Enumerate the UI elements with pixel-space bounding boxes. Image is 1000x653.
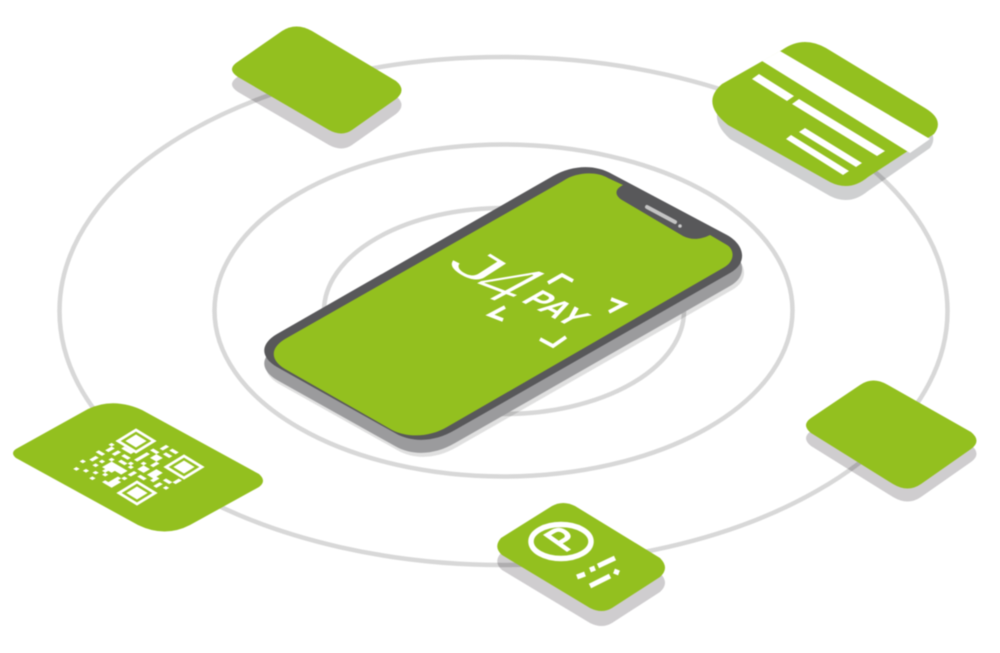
concentric signal rings xyxy=(60,57,948,565)
card: parking xyxy=(497,503,665,626)
scan brackets xyxy=(490,275,624,346)
phone screen with notch xyxy=(274,173,733,435)
card face xyxy=(497,503,665,611)
logo: J: J xyxy=(434,238,522,293)
card shadow xyxy=(717,56,933,200)
card face xyxy=(232,26,402,134)
card shadow xyxy=(497,518,665,626)
smartphone xyxy=(264,167,744,457)
speaker grille xyxy=(647,207,675,222)
logo: PAY: PAY xyxy=(514,285,599,331)
parking letter: P xyxy=(534,520,592,559)
card shadow xyxy=(232,42,402,148)
camera dot xyxy=(678,224,682,228)
logo: 4: 4 xyxy=(446,252,572,314)
card: QR code xyxy=(13,403,263,532)
icon: parking circle xyxy=(531,524,591,558)
QR finder right xyxy=(163,454,205,480)
card face xyxy=(712,42,938,186)
card shadow xyxy=(806,394,976,502)
card detail bars xyxy=(752,74,885,175)
QR data modules xyxy=(70,428,204,506)
card face xyxy=(806,380,976,488)
card: blank top left xyxy=(232,26,402,148)
card: credit card top right xyxy=(712,42,938,200)
parking dashes xyxy=(577,558,619,586)
phone shadow xyxy=(266,184,744,457)
phone side edge xyxy=(264,180,742,453)
QR code xyxy=(70,428,205,506)
QR finder bottom xyxy=(116,480,158,506)
card: blank right xyxy=(806,380,976,502)
QR finder top xyxy=(115,428,157,454)
magnetic stripe xyxy=(762,51,930,153)
phone bezel xyxy=(264,167,742,440)
card face xyxy=(13,403,263,532)
J4 PAY logo xyxy=(434,238,624,346)
